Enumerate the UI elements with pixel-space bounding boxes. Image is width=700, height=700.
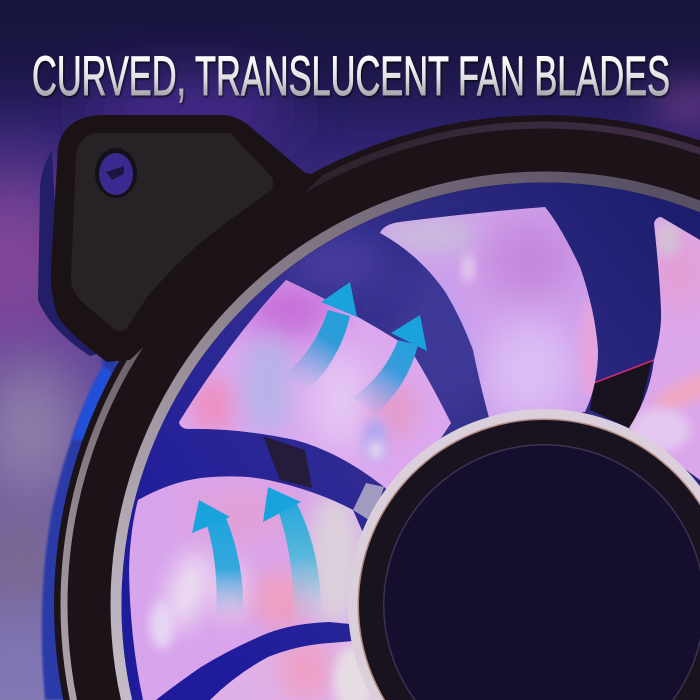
fan interior shadows and struts bbox=[263, 240, 654, 522]
fan blade: middle bbox=[179, 280, 451, 489]
dark hub rim bbox=[359, 420, 700, 700]
fan blade: lower bbox=[125, 470, 375, 700]
translucent hub ring bbox=[348, 409, 700, 700]
hub bbox=[348, 409, 700, 700]
hub cap bbox=[384, 446, 700, 700]
fan blade: top bbox=[380, 207, 598, 417]
airflow arrow 1 bbox=[284, 282, 357, 392]
mounting corner bbox=[51, 115, 330, 362]
corner inset plate bbox=[71, 133, 273, 332]
fan blade: right bbox=[629, 217, 700, 480]
blue rim light on frame edge bbox=[42, 345, 125, 700]
fan frame ring bbox=[54, 115, 700, 700]
airflow arrow 3 bbox=[192, 500, 243, 618]
fan blade: bottom bbox=[210, 641, 372, 700]
navy edge behind corner bbox=[38, 150, 96, 356]
airflow arrow 4 bbox=[263, 487, 321, 625]
screw hole bbox=[95, 148, 137, 198]
airflow arrow 2 bbox=[352, 315, 427, 414]
